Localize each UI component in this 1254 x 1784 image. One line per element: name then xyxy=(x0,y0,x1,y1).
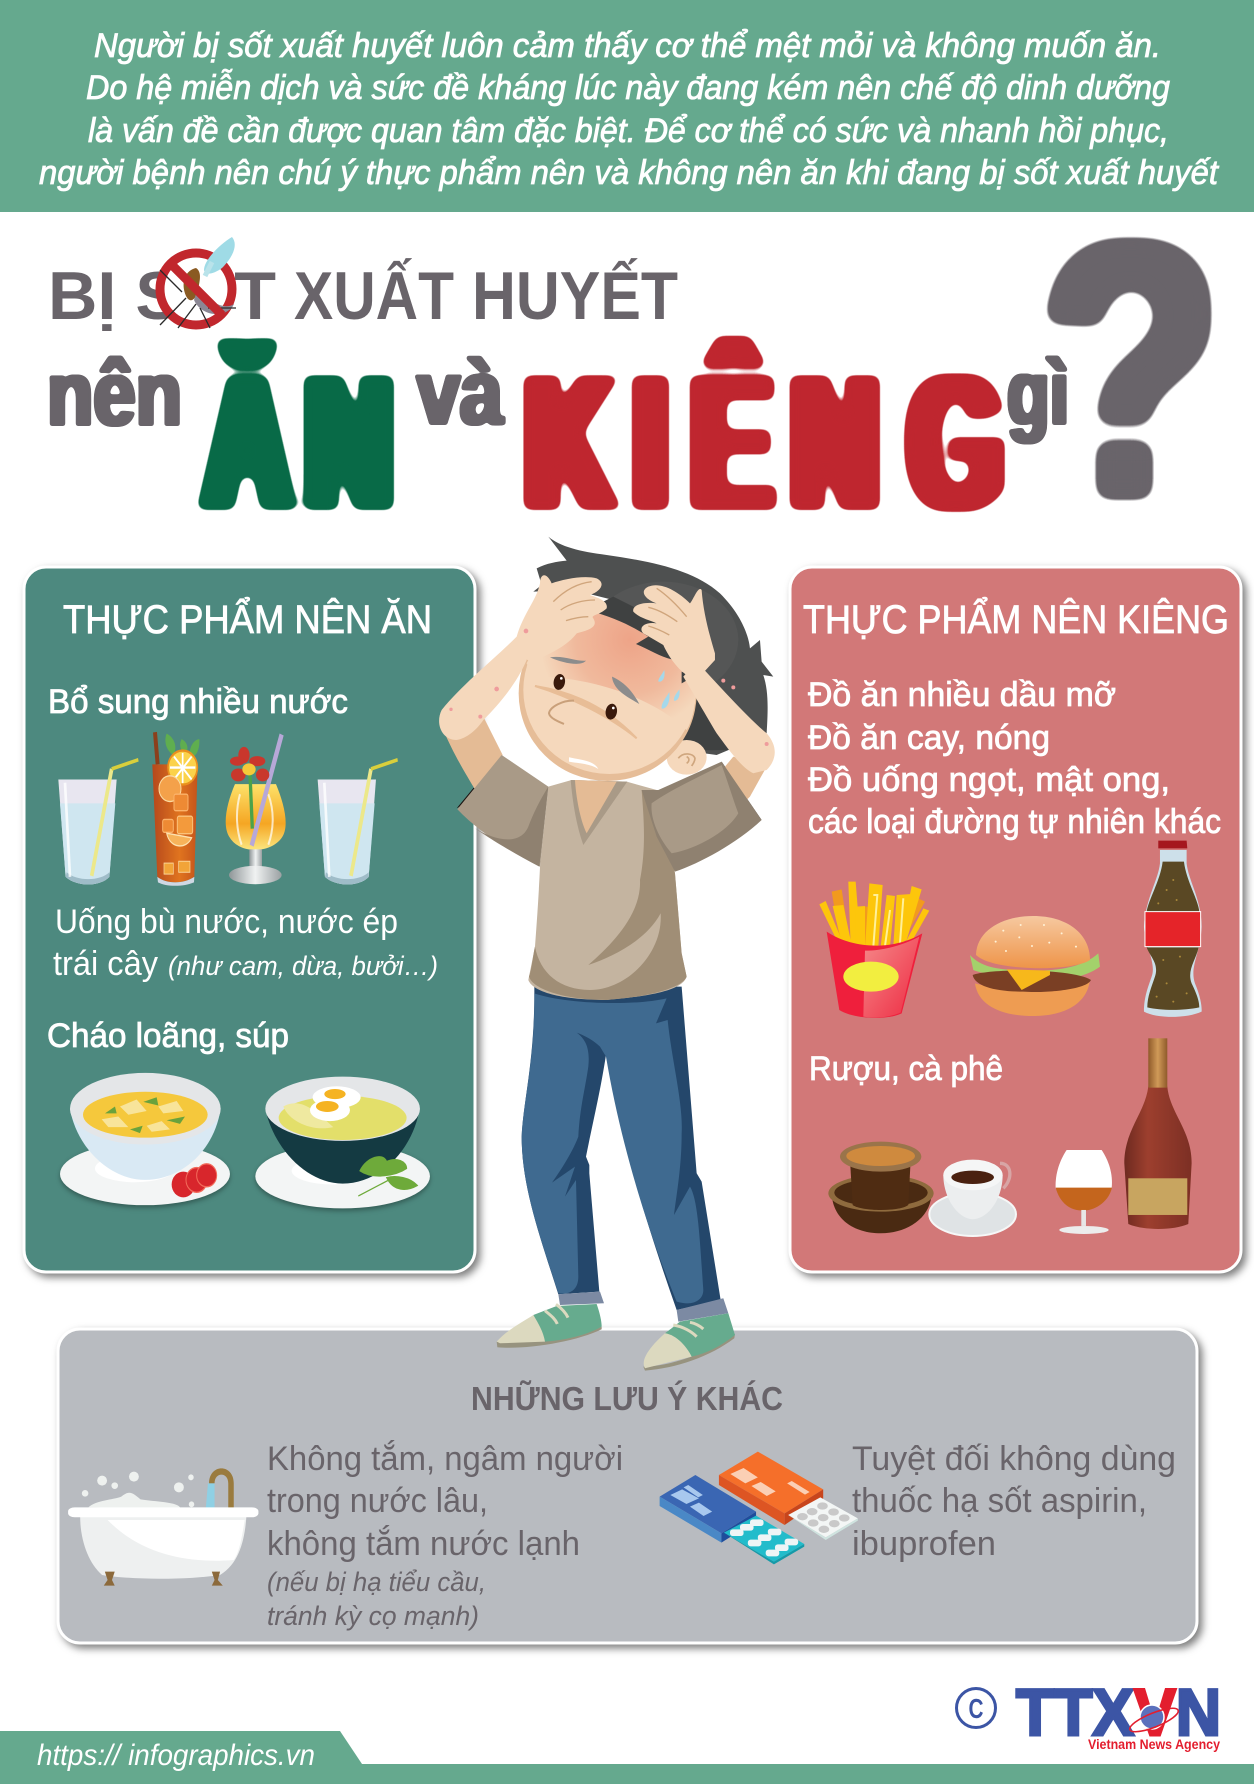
eyes xyxy=(552,673,618,721)
left upper arm xyxy=(443,717,503,793)
intro text: là vấn đề cần được quan tâm đặc biệt. Để cơ thể có sức và nhanh hồi phục, xyxy=(88,112,1169,150)
panel heading: THỰC PHẨM NÊN ĂN xyxy=(63,595,432,642)
blue box xyxy=(660,1475,756,1543)
title line 1: XUẤT xyxy=(294,257,454,334)
trouser cuffs xyxy=(558,1292,728,1322)
right upper arm xyxy=(725,757,767,807)
sweat drops xyxy=(658,670,680,709)
character: sick man xyxy=(439,537,775,1371)
hair fringe xyxy=(587,597,687,659)
white pill strip xyxy=(788,1497,858,1540)
title line 1 xyxy=(48,257,678,334)
text: alcohol and coffee: Rượu, cà phê xyxy=(809,1050,1003,1088)
title line 1: HUYẾT xyxy=(472,257,678,334)
icon: medicine boxes xyxy=(660,1452,858,1564)
icon: phin coffee filter xyxy=(828,1142,934,1233)
copyright symbol xyxy=(956,1688,996,1728)
mouth xyxy=(569,757,598,769)
panel: other notes xyxy=(58,1329,1197,1643)
right sleeve xyxy=(642,762,762,872)
teal pill strip xyxy=(724,1516,804,1564)
panel background xyxy=(790,567,1241,1272)
panel background xyxy=(58,1329,1197,1643)
source url: https:// infographics.vn xyxy=(37,1739,315,1772)
icon: cocktail xyxy=(226,734,286,884)
torso xyxy=(528,780,687,1000)
panel: foods to eat xyxy=(24,567,475,1272)
text: bathing note xyxy=(267,1567,486,1631)
left arm and hand xyxy=(439,575,607,740)
list of foods to avoid: các loại đường tự nhiên khác xyxy=(808,803,1221,841)
icon: french fries xyxy=(819,882,929,1018)
logo: TTXVN: TTXVN xyxy=(1016,1675,1221,1749)
panel heading: NHỮNG LƯU Ý KHÁC xyxy=(471,1380,783,1417)
icon: brandy bottle xyxy=(1124,1038,1192,1229)
title xyxy=(47,169,1220,571)
footer band xyxy=(0,1731,1254,1784)
intro text: Người bị sốt xuất huyết luôn cảm thấy cơ thể mệt mỏi và không muốn ăn. xyxy=(94,27,1161,65)
text: drinks: Uống bù nước, nước ép xyxy=(55,903,398,941)
orange box xyxy=(719,1452,823,1525)
soups illustration xyxy=(60,1073,430,1208)
subheading: water: Bổ sung nhiều nước xyxy=(48,683,348,721)
icon: bathtub xyxy=(68,1468,258,1586)
text: medicine advice xyxy=(852,1440,1176,1563)
head and torso xyxy=(439,537,775,1000)
black sleeve insides xyxy=(457,762,762,820)
intro text: người bệnh nên chú ý thực phẩm nên và không nên ăn khi đang bị sốt xuất huyết xyxy=(39,154,1219,192)
icon: brandy glass xyxy=(1056,1150,1112,1234)
list of foods to avoid: Đồ uống ngọt, mật ong, xyxy=(808,761,1170,799)
copyright symbol: C xyxy=(968,1693,984,1724)
right shoe xyxy=(643,1313,735,1371)
text: medicine advice: ibuprofen xyxy=(852,1525,996,1563)
intro text: Do hệ miễn dịch và sức đề kháng lúc này đang kém nên chế độ dinh dưỡng xyxy=(86,69,1170,107)
title: ĂN: ĂN xyxy=(204,336,392,549)
icon: mosquito in prohibition sign xyxy=(160,237,236,328)
text: bathing advice: Không tắm, ngâm người xyxy=(267,1440,623,1478)
icon: coffee cup xyxy=(929,1160,1016,1236)
list of foods to avoid: Đồ ăn cay, nóng xyxy=(808,719,1050,757)
icon: congee bowl xyxy=(255,1077,430,1208)
drinks illustration xyxy=(58,732,398,886)
panel background xyxy=(24,567,475,1272)
icon: burger xyxy=(970,916,1100,1016)
right arm and hand xyxy=(633,585,775,773)
header band xyxy=(0,0,1254,212)
title: và: và xyxy=(417,342,504,444)
footer xyxy=(0,1675,1254,1784)
logo: TTXVN: Vietnam News Agency xyxy=(1088,1737,1220,1752)
icon: soup bowl xyxy=(60,1073,230,1205)
subheading: porridge: Cháo loãng, súp xyxy=(47,1017,289,1055)
icon: cola bottle xyxy=(1144,841,1202,1017)
title: nên: nên xyxy=(47,343,182,445)
legs xyxy=(497,987,735,1371)
illustrations xyxy=(819,841,1202,1236)
text: fruit examples: (như cam, dừa, bưởi…) xyxy=(168,951,438,981)
text: medicine advice: thuốc hạ sốt aspirin, xyxy=(852,1482,1147,1520)
left sleeve xyxy=(457,755,548,867)
intro text xyxy=(39,27,1219,192)
text: medicine advice: Tuyệt đối không dùng xyxy=(852,1440,1176,1478)
icon: water glass xyxy=(318,760,398,884)
list of foods to avoid xyxy=(808,676,1221,841)
icon: iced tea xyxy=(152,732,199,886)
hair back xyxy=(533,537,773,755)
panel: foods to avoid xyxy=(790,567,1241,1272)
text: bathing advice: không tắm nước lạnh xyxy=(267,1525,580,1563)
title: gì: gì xyxy=(1007,342,1069,444)
list of foods to avoid: Đồ ăn nhiều dầu mỡ xyxy=(808,676,1116,714)
left shoe xyxy=(497,1304,602,1348)
icon: water glass xyxy=(58,760,138,884)
collar xyxy=(571,780,627,845)
title: KIÊNG: KIÊNG xyxy=(525,336,1002,549)
text: fruit: trái cây xyxy=(53,945,158,983)
title: question mark: ? xyxy=(1041,169,1220,571)
face xyxy=(519,606,697,781)
text: bathing note: tránh kỳ cọ mạnh) xyxy=(267,1601,479,1631)
hair at neck xyxy=(680,687,728,751)
text: bathing advice xyxy=(267,1440,623,1563)
title line 1: BỊ SỐT xyxy=(48,257,276,334)
text: bathing advice: trong nước lâu, xyxy=(267,1482,488,1520)
background xyxy=(0,0,1254,212)
ear xyxy=(667,740,707,775)
nose xyxy=(549,701,574,724)
text: bathing note: (nếu bị hạ tiểu cầu, xyxy=(267,1567,486,1597)
panel: intro header xyxy=(0,0,1254,212)
eyebrows xyxy=(550,657,639,704)
